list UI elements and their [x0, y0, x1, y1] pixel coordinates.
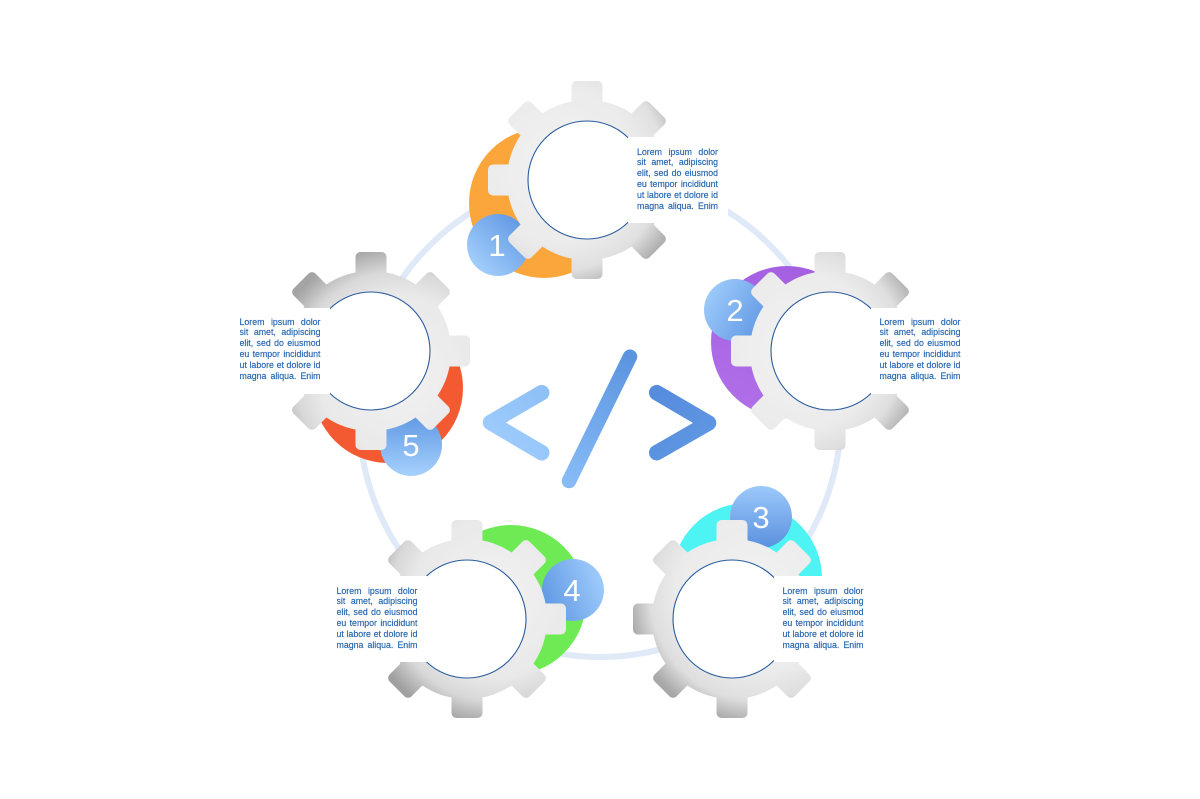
- text block 3: ut labore et dolore id: [782, 629, 864, 639]
- text block 4: ut labore et dolore id: [336, 629, 418, 639]
- text block 3: elit, sed do eiusmod: [782, 607, 864, 617]
- text block 4: [330, 576, 427, 662]
- text block 3: magna aliqua. Enim: [782, 640, 864, 650]
- text block 1: magna aliqua. Enim: [637, 201, 718, 211]
- text block 2: ut labore et dolore id: [880, 360, 960, 370]
- badge 3: 3: [752, 500, 770, 535]
- badge 5: 5: [402, 428, 420, 463]
- gear 4: [373, 525, 561, 713]
- text block 5: ut labore et dolore id: [240, 360, 320, 370]
- orange accent: [469, 128, 619, 278]
- text block 4: magna aliqua. Enim: [336, 640, 418, 650]
- panel: step 1 gear: [467, 86, 728, 278]
- purple accent: [711, 266, 863, 418]
- text block 4: elit, sed do eiusmod: [336, 607, 418, 617]
- text block 1: sit amet, adipiscing: [637, 157, 718, 167]
- text block 3: eu tempor incididunt: [782, 618, 864, 628]
- text block 2: Lorem ipsum dolor: [880, 317, 960, 327]
- text block 5: sit amet, adipiscing: [240, 327, 320, 337]
- badge 2: 2: [726, 293, 744, 328]
- gear 1: [493, 86, 681, 274]
- text block 3: sit amet, adipiscing: [782, 596, 864, 606]
- text block 2: eu tempor incididunt: [880, 349, 960, 359]
- text block 3: [774, 576, 872, 662]
- code symbol: [490, 357, 708, 481]
- cyan accent: [672, 503, 822, 653]
- badge 2: [704, 279, 766, 341]
- red accent: [313, 313, 463, 463]
- panel: step 2 gear: [704, 257, 969, 445]
- text block 5: eu tempor incididunt: [240, 349, 320, 359]
- text block 2: elit, sed do eiusmod: [880, 338, 960, 348]
- badge 1: [467, 214, 529, 276]
- text block 5: Lorem ipsum dolor: [240, 317, 320, 327]
- text block 2: [871, 308, 969, 394]
- text block 2: magna aliqua. Enim: [880, 371, 960, 381]
- text block 1: elit, sed do eiusmod: [637, 168, 718, 178]
- gear 5: [277, 257, 465, 445]
- text block 1: eu tempor incididunt: [637, 179, 718, 189]
- text block 1: ut labore et dolore id: [637, 190, 718, 200]
- text block 5: elit, sed do eiusmod: [240, 338, 320, 348]
- text block 5: magna aliqua. Enim: [240, 371, 320, 381]
- text block 2: sit amet, adipiscing: [880, 327, 960, 337]
- text block 1: Lorem ipsum dolor: [637, 147, 718, 157]
- gear 3: [638, 525, 826, 713]
- connecting ring: [359, 175, 841, 657]
- panel: step 5 gear: [232, 257, 465, 476]
- panel: step 3 gear: [638, 486, 872, 713]
- text block 4: sit amet, adipiscing: [336, 596, 418, 606]
- text block 3: Lorem ipsum dolor: [782, 586, 864, 596]
- badge 5: [380, 414, 442, 476]
- badge 3: [730, 486, 792, 548]
- badge 4: 4: [563, 573, 581, 608]
- green accent: [436, 525, 586, 675]
- badge 4: [542, 559, 604, 621]
- badge 1: 1: [488, 228, 506, 263]
- panel: step 4 gear: [330, 525, 604, 713]
- gear 2: [736, 257, 924, 445]
- text block 4: eu tempor incididunt: [336, 618, 418, 628]
- text block 1: [628, 137, 728, 223]
- text block 5: [232, 308, 330, 394]
- text block 4: Lorem ipsum dolor: [336, 586, 418, 596]
